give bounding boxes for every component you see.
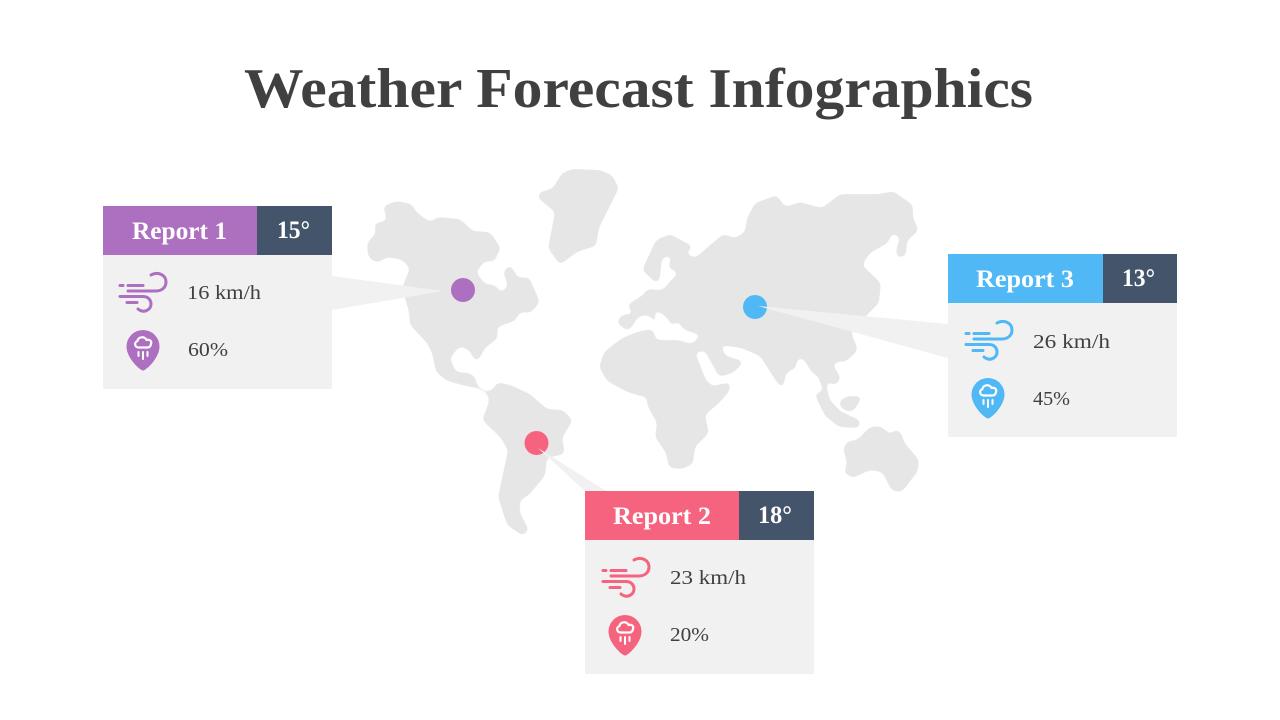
map: Eurasia and Africa xyxy=(599,191,919,469)
icon: rain pin xyxy=(126,330,160,370)
icon: wind xyxy=(966,321,1012,359)
header: Report 1 xyxy=(103,206,257,255)
title: Weather Forecast Infographics xyxy=(244,58,1033,120)
panel: Report 2 xyxy=(585,491,814,674)
map: Australia xyxy=(843,426,919,492)
header: Report 3 xyxy=(948,254,1103,303)
icon: rain pin xyxy=(972,378,1004,418)
humidity: 60% xyxy=(188,339,228,361)
panel body xyxy=(103,255,332,389)
header: Report 3: Report 3 xyxy=(976,266,1074,293)
location dot: Report 1 xyxy=(451,278,475,302)
icon: rain pin xyxy=(608,615,642,656)
wind speed: 16 km/h xyxy=(187,282,261,304)
callout beam: Report 2 xyxy=(538,448,606,491)
wind speed: 23 km/h xyxy=(670,567,746,589)
world map xyxy=(367,169,919,536)
icon: wind xyxy=(120,273,166,311)
temperature: 13 degrees: 13° xyxy=(1122,265,1155,292)
map: Borneo xyxy=(838,396,863,412)
header: Report 1: Report 1 xyxy=(132,218,227,245)
panel body xyxy=(948,303,1177,437)
location dot: Report 2 xyxy=(524,431,548,455)
map: Greenland xyxy=(538,169,619,265)
wind speed: 26 km/h xyxy=(1033,331,1110,353)
header: Report 2: Report 2 xyxy=(613,503,711,530)
map: North and Central America xyxy=(367,201,540,398)
temperature: 18 degrees xyxy=(739,491,814,540)
panel: Report 3 xyxy=(948,254,1177,437)
panel: Report 1 xyxy=(103,206,332,389)
temperature: 13 degrees xyxy=(1103,254,1177,303)
temperature: 15 degrees xyxy=(257,206,332,255)
humidity: 45% xyxy=(1033,388,1070,410)
temperature: 15 degrees: 15° xyxy=(277,217,310,244)
callout beam: Report 1 xyxy=(332,276,443,310)
location dot: Report 3 xyxy=(743,295,767,319)
temperature: 18 degrees: 18° xyxy=(758,502,792,529)
humidity: 20% xyxy=(670,624,709,646)
panel body xyxy=(585,540,814,674)
map: Sumatra and Java xyxy=(814,392,860,428)
map: South America xyxy=(482,382,573,536)
callout beam: Report 3 xyxy=(758,306,948,358)
icon: wind xyxy=(603,558,649,596)
header: Report 2 xyxy=(585,491,739,540)
